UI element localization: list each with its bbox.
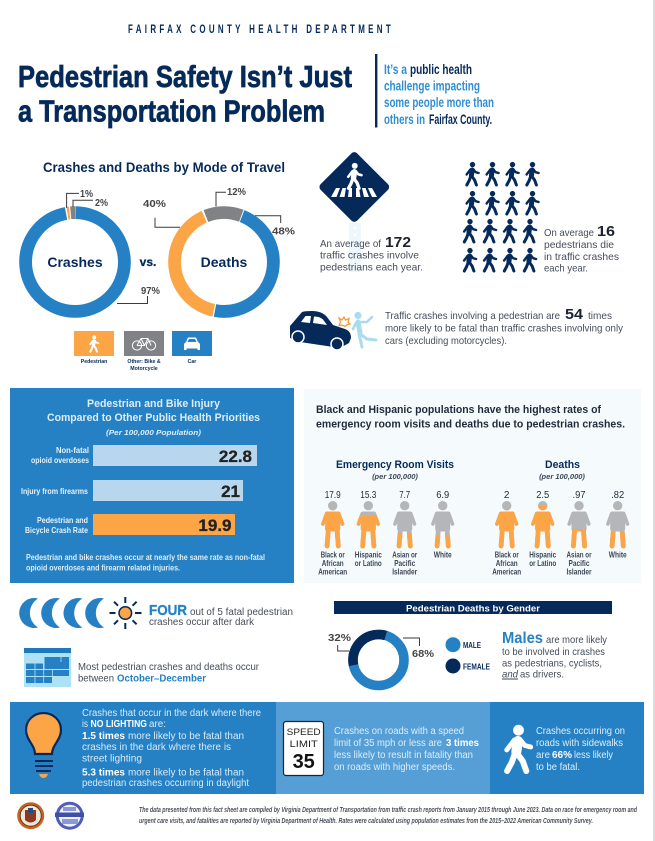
legend: male: [446, 637, 481, 652]
stat: males: [502, 630, 608, 680]
figure: deaths black or African American: 2: [504, 490, 510, 501]
figure: deaths White: .82: [611, 490, 625, 501]
figure: deaths White: White: [609, 550, 627, 560]
logo: Fairfax County seal: [17, 802, 44, 829]
donut chart: gender: [328, 630, 435, 690]
donut chart: crashes: Crashes: [47, 254, 103, 270]
panel heading: emergency room visits and deaths due to pedestrian crashes.: [316, 418, 625, 430]
icon: light bulb: [26, 713, 61, 778]
bar: injury from firearms: 21: [221, 482, 240, 501]
legend: car: Car: [188, 359, 196, 365]
figure: deaths Asian or Pacific Islander: Islander: [566, 566, 592, 576]
text: no lighting findings: pedestrian crashes occurring in daylight: [82, 778, 249, 789]
stat: four out of five: crashes occur after dark: [149, 617, 255, 628]
stat: october to december: between: [78, 674, 114, 684]
bar: pedestrian and bicycle crash rate: Pedestrian and: [37, 515, 88, 525]
figure: deaths Hispanic or Latino: or Latino: [529, 558, 556, 568]
gender heading bar: [334, 601, 612, 614]
text: no lighting findings: are:: [149, 719, 166, 730]
icon: speed limit sign: LIMIT: [290, 739, 318, 750]
figure: deaths Asian or Pacific Islander: Pacific: [568, 558, 590, 568]
figure: ER black or African American: [318, 490, 347, 576]
stat: 54 times: 54: [565, 306, 584, 323]
footnote: [139, 805, 637, 825]
figure: ER Asian or Pacific Islander: 7.7: [399, 490, 411, 501]
text: no lighting findings: NO LIGHTING: [90, 719, 147, 730]
figure: deaths Hispanic or Latino: 2.5: [536, 490, 550, 501]
text: no lighting findings: crashes in the dark where there is: [82, 742, 231, 753]
figure: ER Asian or Pacific Islander: Islander: [392, 566, 418, 576]
donut chart: crashes: 97%: [141, 285, 161, 297]
panel note: [26, 552, 265, 572]
figure: deaths Asian or Pacific Islander: .97: [572, 490, 586, 501]
figure: ER Hispanic or Latino: or Latino: [355, 558, 382, 568]
figure: deaths White: [608, 490, 628, 560]
subheading: deaths: [539, 459, 585, 481]
subtitle callout: challenge impacting: [384, 78, 480, 94]
icon grid: 16 pedestrians: [464, 162, 539, 271]
text: speed finding: 3 times: [446, 738, 479, 749]
stat: 16 deaths: On average: [544, 228, 594, 239]
panel: race and ethnicity rates: [304, 389, 641, 583]
figure: ER Asian or Pacific Islander: Asian or: [392, 550, 418, 560]
gender heading bar: Pedestrian Deaths by Gender: [406, 603, 540, 614]
panel: pedestrian deaths by gender: [328, 601, 612, 690]
figure: ER Hispanic or Latino: 15.3: [360, 490, 377, 501]
subtitle callout: some people more than: [384, 95, 494, 110]
text: sidewalk finding: 66%: [552, 750, 572, 761]
subheading: deaths: (per 100,000): [539, 472, 585, 481]
bar: pedestrian and bicycle crash rate: [25, 514, 235, 535]
bar: pedestrian and bicycle crash rate: 19.9: [198, 516, 232, 535]
text: no lighting findings: more likely to be fatal than: [128, 768, 244, 778]
figure: deaths black or African American: [492, 490, 521, 576]
stat: 16 deaths: [544, 224, 619, 274]
stat: october to december: [78, 662, 260, 684]
stat: four out of five: FOUR: [149, 603, 187, 619]
donut chart: deaths: 48%: [272, 226, 296, 238]
figure: deaths black or African American: Black or: [495, 550, 519, 560]
text: sidewalk finding: roads with sidewalks: [536, 738, 623, 749]
figure: ER White: 6.9: [436, 490, 450, 501]
subtitle callout: [375, 54, 494, 128]
panel: no lighting: [10, 702, 276, 794]
icon: calendar: [24, 648, 71, 687]
stat: 54 times: [385, 306, 624, 347]
bar: non-fatal opioid overdoses: Non-fatal: [56, 445, 89, 455]
text: speed finding: [334, 726, 479, 773]
donut chart: deaths: Deaths: [201, 254, 248, 270]
panel note: opioid overdoses and firearm related injuries.: [26, 562, 180, 572]
text: no lighting findings: street lighting: [82, 754, 142, 764]
subheading: deaths: Deaths: [545, 459, 580, 471]
figure: deaths black or African American: African: [496, 558, 518, 568]
figure: deaths Asian or Pacific Islander: [566, 490, 592, 576]
stat: 172 crashes: traffic crashes involve: [320, 250, 419, 262]
icon: car hitting pedestrian: [290, 311, 376, 350]
figure: deaths black or African American: American: [492, 566, 521, 576]
stat: males: as pedestrians, cyclists,: [502, 658, 602, 670]
stat: four out of five: [149, 603, 293, 628]
stat: males: are more likely: [546, 635, 608, 646]
panel heading: Black and Hispanic populations have the highest rates of: [316, 404, 601, 416]
title: [18, 60, 352, 128]
legend: pedestrian: Pedestrian: [81, 359, 107, 365]
subheading: emergency room visits: (per 100,000): [372, 472, 418, 481]
stat: males: and: [502, 670, 518, 680]
donut chart: crashes: 1%: [80, 188, 94, 200]
donut chart: gender: 68%: [412, 648, 435, 660]
panel heading: Pedestrian and Bike Injury: [87, 398, 221, 410]
legend: female: [446, 658, 490, 674]
donut chart: deaths: [143, 186, 296, 326]
title: a Transportation Problem: [18, 94, 325, 128]
stat: 16 deaths: pedestrians die: [544, 240, 614, 251]
stat: males: Males: [502, 630, 543, 647]
figure: ER black or African American: African: [322, 558, 344, 568]
donut chart: gender: 32%: [328, 632, 352, 644]
figure: ER White: [433, 490, 452, 560]
icon: speed limit sign: [284, 722, 324, 776]
panel: sidewalks: [490, 702, 644, 794]
text: no lighting findings: more likely to be fatal than: [128, 731, 244, 742]
subtitle callout: It’s a: [384, 62, 407, 77]
panel: injury compared to other priorities: [10, 388, 294, 583]
title: Pedestrian Safety Isn’t Just: [18, 60, 352, 94]
text: speed finding: Crashes on roads with a speed: [334, 726, 464, 737]
legend: other bike and motorcycle: Other: Bike &: [127, 359, 161, 365]
icon: speed limit sign: 35: [293, 751, 315, 773]
panel heading: [316, 404, 625, 430]
stat: 16 deaths: 16: [597, 224, 615, 240]
subheading: emergency room visits: [336, 459, 454, 481]
chart heading: Crashes and Deaths by Mode of Travel: [43, 160, 285, 175]
donut chart: crashes: 2%: [95, 197, 109, 209]
figure: ER Asian or Pacific Islander: Pacific: [394, 558, 415, 568]
text: sidewalk finding: [536, 726, 625, 773]
icon: moons and sun: [19, 597, 141, 629]
bar: non-fatal opioid overdoses: opioid overdoses: [31, 455, 89, 465]
stat: 16 deaths: in traffic crashes: [544, 252, 619, 263]
legend: other bike and motorcycle: [124, 331, 164, 372]
text: speed finding: less likely to result in fatality than: [334, 750, 473, 761]
panel heading: Compared to Other Public Health Priorities: [47, 412, 260, 424]
stat: 172 crashes: [320, 235, 423, 274]
donut chart: deaths: 12%: [227, 186, 247, 198]
text: no lighting findings: 5.3 times: [82, 768, 125, 778]
figure: ER Asian or Pacific Islander: [392, 490, 418, 576]
bar: injury from firearms: Injury from firearms: [21, 486, 88, 496]
stat: males: as drivers.: [520, 670, 564, 680]
subtitle callout: others in: [384, 112, 425, 127]
stat: 54 times: times: [588, 311, 612, 322]
figure: ER black or African American: 17.9: [325, 490, 341, 501]
panel: speed limit: [276, 702, 490, 794]
figure: ER Hispanic or Latino: [355, 490, 382, 568]
vs label: vs.: [140, 255, 156, 269]
icon: speed limit sign: SPEED: [287, 727, 321, 738]
icon: walking person: [507, 725, 531, 771]
logo: health department seal: [55, 802, 84, 830]
text: sidewalk finding: Crashes occurring on: [536, 726, 625, 737]
figure: deaths Hispanic or Latino: Hispanic: [529, 550, 556, 560]
stat: males: to be involved in crashes: [502, 647, 605, 658]
subtitle callout: public health: [410, 62, 472, 77]
panel heading: (Per 100,000 Population): [106, 428, 202, 437]
header: department name: FAIRFAX COUNTY HEALTH DEPARTMENT: [128, 22, 394, 36]
text: no lighting findings: [82, 708, 261, 789]
text: speed finding: limit of 35 mph or less are: [334, 738, 442, 749]
stat: 172 crashes: 172: [385, 235, 411, 251]
figure: ER black or African American: American: [318, 566, 347, 576]
figure: deaths Hispanic or Latino: [529, 490, 556, 568]
legend: female: FEMALE: [463, 662, 490, 671]
panel: crashes and deaths by mode of travel: [19, 160, 296, 372]
donut chart: deaths: 40%: [143, 198, 167, 210]
stat: 54 times: more likely to be fatal than traffic crashes involving only: [385, 324, 624, 334]
stat: four out of five: out of 5 fatal pedestrian: [190, 607, 293, 618]
figure: deaths Asian or Pacific Islander: Asian or: [566, 550, 592, 560]
bar: pedestrian and bicycle crash rate: Bicycle Crash Rate: [25, 525, 88, 535]
figure: ER Hispanic or Latino: Hispanic: [355, 550, 382, 560]
stat: 172 crashes: An average of: [320, 239, 381, 250]
legend: other bike and motorcycle: Motorcycle: [130, 366, 158, 372]
legend: [74, 331, 212, 372]
stat: 16 deaths: each year.: [544, 264, 588, 274]
bar: non-fatal opioid overdoses: 22.8: [219, 447, 252, 466]
text: no lighting findings: Crashes that occur in the dark where there: [82, 708, 261, 719]
donut chart: crashes: [19, 188, 161, 318]
stat: 54 times: Traffic crashes involving a pedestrian are: [385, 311, 560, 322]
text: sidewalk finding: less likely: [574, 750, 613, 761]
stat: 172 crashes: pedestrians each year.: [320, 262, 423, 274]
text: sidewalk finding: are: [536, 750, 550, 761]
bar: injury from firearms: [21, 480, 243, 501]
stat: october to december: October–December: [117, 674, 206, 684]
icon: crosswalk sign: [318, 151, 391, 272]
bar: non-fatal opioid overdoses: [31, 445, 257, 466]
text: no lighting findings: is: [82, 719, 88, 730]
panel heading: [47, 398, 260, 437]
text: sidewalk finding: to be fatal.: [536, 762, 580, 773]
figure: ER White: White: [434, 550, 452, 560]
subheading: emergency room visits: Emergency Room Visits: [336, 459, 454, 471]
figure: ER black or African American: Black or: [321, 550, 345, 560]
text: speed finding: on roads with higher speeds.: [334, 762, 455, 773]
subtitle callout: Fairfax County.: [429, 112, 492, 127]
stat: october to december: Most pedestrian crashes and deaths occur: [78, 662, 260, 673]
panel note: Pedestrian and bike crashes occur at nearly the same rate as non-fatal: [26, 552, 265, 562]
text: no lighting findings: 1.5 times: [82, 731, 125, 742]
stat: 54 times: cars (excluding motorcycles).: [385, 336, 507, 347]
legend: male: MALE: [463, 641, 481, 650]
